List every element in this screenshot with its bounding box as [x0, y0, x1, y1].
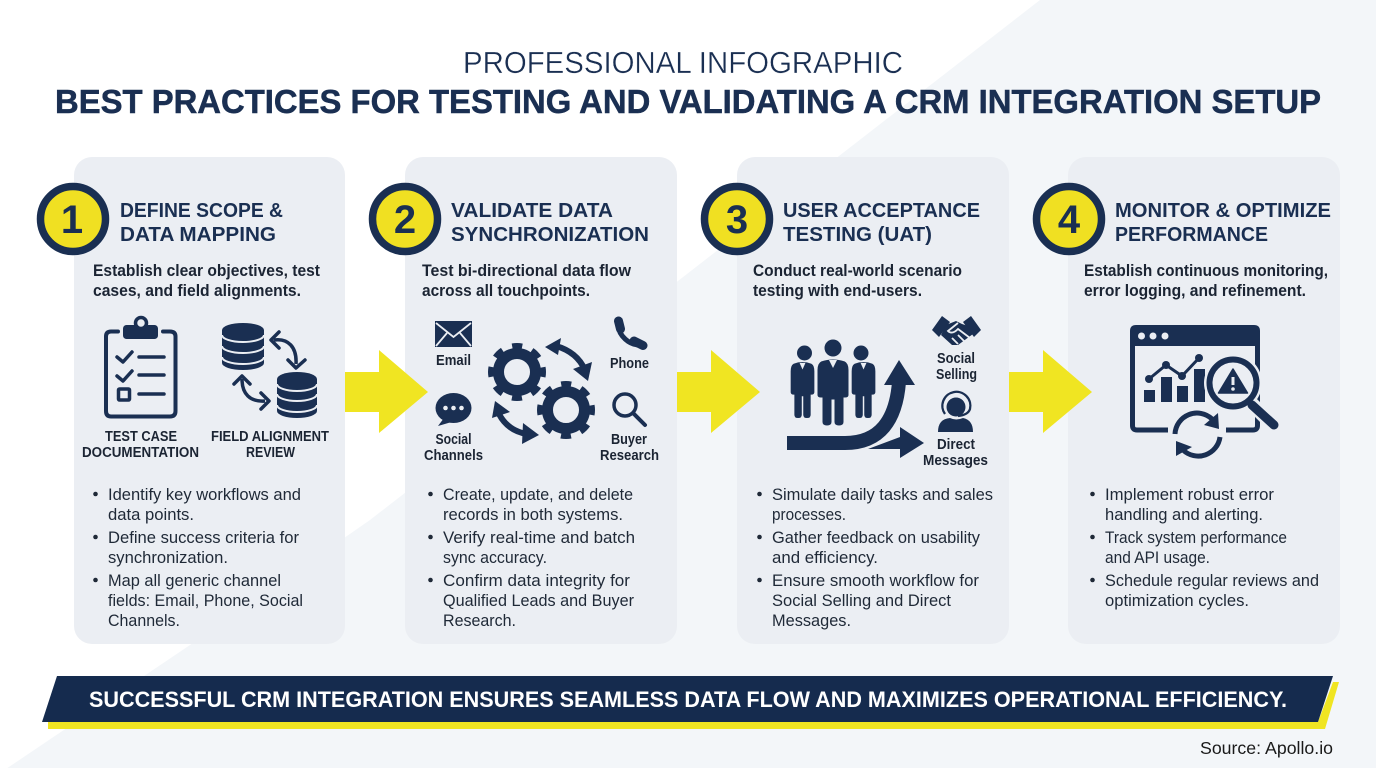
- step 1 bullet list: fields: Email, Phone, Social: [108, 592, 303, 610]
- step 2 bullet list: sync accuracy.: [443, 549, 547, 567]
- label: social channels: [424, 432, 483, 464]
- step 2 bullet list: Create, update, and delete: [443, 486, 633, 504]
- step 1 description: Establish clear objectives, test: [93, 262, 320, 280]
- step 1 bullet list: Map all generic channel: [108, 572, 281, 590]
- step 2 bullet list: records in both systems.: [443, 506, 623, 524]
- step 2 description: across all touchpoints.: [422, 282, 590, 300]
- step 2 bullet list: Qualified Leads and Buyer: [443, 592, 634, 610]
- step 3 number badge: [704, 186, 770, 252]
- icon labels: [82, 429, 329, 461]
- step 2 number badge: 2: [394, 198, 416, 242]
- banner: conclusion: [42, 676, 1339, 729]
- step 4 bullet list: [1090, 486, 1319, 610]
- icon: email envelope: [435, 321, 472, 347]
- step 2 description: Test bi-directional data flow: [422, 262, 631, 280]
- step 3 description: Conduct real-world scenario: [753, 262, 962, 280]
- icon: databases with sync arrows: [222, 323, 317, 418]
- label: social selling: Social: [937, 351, 975, 367]
- step 4 bullet list: Implement robust error: [1105, 486, 1274, 504]
- step 1 heading: [120, 199, 283, 246]
- step 3 bullet list: Simulate daily tasks and sales: [772, 486, 993, 504]
- step 4 heading: PERFORMANCE: [1115, 223, 1268, 246]
- step 3 bullet list: and efficiency.: [772, 549, 878, 567]
- step 2 heading: VALIDATE DATA: [451, 199, 613, 222]
- step 4 bullet list: Track system performance: [1105, 529, 1287, 547]
- step 4 description: error logging, and refinement.: [1084, 282, 1306, 300]
- label: social selling: [936, 351, 977, 383]
- step 3 bullet list: processes.: [772, 506, 846, 524]
- icon labels: DOCUMENTATION: [82, 445, 199, 461]
- icon: chat bubble: [436, 393, 472, 426]
- step 3 bullet list: Social Selling and Direct: [772, 592, 951, 610]
- step 1 number badge: 1: [61, 198, 83, 242]
- label: phone: Phone: [610, 356, 649, 372]
- step 1 heading: DEFINE SCOPE &: [120, 199, 283, 222]
- label: email: Email: [436, 353, 471, 369]
- step 2 bullet list: Research.: [443, 612, 516, 630]
- label: direct messages: Direct: [937, 437, 975, 453]
- title: PROFESSIONAL INFOGRAPHIC: [463, 45, 903, 80]
- step 1 bullet list: [93, 486, 303, 630]
- step 1 description: cases, and field alignments.: [93, 282, 301, 300]
- label: buyer research: [600, 432, 659, 464]
- icon: dashboard window with alert magnifier and sync: [1130, 325, 1274, 456]
- step 4 description: [1084, 262, 1328, 300]
- step 3 bullet list: [757, 486, 993, 630]
- icon labels: TEST CASE: [105, 429, 177, 445]
- arrow: step 1 to 2: [345, 350, 428, 433]
- step 1 bullet list: Define success criteria for: [108, 529, 299, 547]
- label: direct messages: [923, 437, 988, 469]
- icon labels: REVIEW: [246, 445, 295, 461]
- step 2 bullet list: Confirm data integrity for: [443, 572, 631, 590]
- banner: conclusion: SUCCESSFUL CRM INTEGRATION ENSURES SEAMLESS DATA FLOW AND MAXIMIZES OPERATIONAL EFFICIENCY.: [89, 687, 1287, 712]
- step 4 heading: [1115, 199, 1331, 246]
- step 4 bullet list: and API usage.: [1105, 549, 1210, 567]
- step 2 number badge: [372, 186, 438, 252]
- icon: clipboard checklist: [106, 318, 176, 416]
- step 2 heading: [451, 199, 649, 246]
- step 1 bullet list: synchronization.: [108, 549, 228, 567]
- arrow: step 3 to 4: [1009, 350, 1092, 433]
- step 3 heading: [783, 199, 980, 246]
- arrow: step 2 to 3: [677, 350, 760, 433]
- step 4 heading: MONITOR & OPTIMIZE: [1115, 199, 1331, 222]
- step 2 heading: SYNCHRONIZATION: [451, 223, 649, 246]
- source note: Source: Apollo.io: [1200, 738, 1333, 758]
- step 2 description: [422, 262, 631, 300]
- label: social channels: Social: [436, 432, 472, 448]
- icon: magnifier: [614, 394, 645, 425]
- title: [55, 45, 1321, 120]
- label: social channels: Channels: [424, 448, 483, 464]
- step 4 number badge: [1036, 186, 1102, 252]
- step 3 bullet list: Messages.: [772, 612, 851, 630]
- step 3 description: [753, 262, 962, 300]
- step 4 bullet list: handling and alerting.: [1105, 506, 1263, 524]
- step 4 bullet list: optimization cycles.: [1105, 592, 1249, 610]
- label: social selling: Selling: [936, 367, 977, 383]
- icon: gears with sync arrows: [491, 338, 592, 444]
- step 4 description: Establish continuous monitoring,: [1084, 262, 1328, 280]
- icon: team of users with rising arrow: [787, 340, 924, 458]
- step 1 heading: DATA MAPPING: [120, 223, 276, 246]
- step 3 bullet list: Gather feedback on usability: [772, 529, 981, 547]
- step 3 heading: USER ACCEPTANCE: [783, 199, 980, 222]
- step 1 bullet list: Identify key workflows and: [108, 486, 301, 504]
- panel: step 4 monitor and optimize performance: [1036, 157, 1340, 644]
- label: buyer research: Buyer: [611, 432, 647, 448]
- step 4 number badge: 4: [1058, 198, 1081, 242]
- panel: step 3 user acceptance testing: [704, 157, 1009, 644]
- step 3 bullet list: Ensure smooth workflow for: [772, 572, 980, 590]
- icon labels: FIELD ALIGNMENT: [211, 429, 329, 445]
- step 1 description: [93, 262, 320, 300]
- icon: phone: [618, 321, 643, 346]
- step 1 bullet list: data points.: [108, 506, 194, 524]
- step 1 bullet list: Channels.: [108, 612, 180, 630]
- title: BEST PRACTICES FOR TESTING AND VALIDATING A CRM INTEGRATION SETUP: [55, 83, 1321, 120]
- panel: step 2 validate data synchronization: [372, 157, 677, 644]
- step 3 heading: TESTING (UAT): [783, 223, 932, 246]
- icon: headset support agent: [938, 392, 973, 432]
- icon: handshake: [932, 316, 981, 345]
- step 4 bullet list: Schedule regular reviews and: [1105, 572, 1319, 590]
- step 1 number badge: [40, 186, 106, 252]
- step 2 bullet list: Verify real-time and batch: [443, 529, 635, 547]
- step 3 number badge: 3: [726, 198, 748, 242]
- label: direct messages: Messages: [923, 453, 988, 469]
- label: buyer research: Research: [600, 448, 659, 464]
- step 2 bullet list: [428, 486, 635, 630]
- step 3 description: testing with end-users.: [753, 282, 922, 300]
- panel: step 1 define scope and data mapping: [40, 157, 345, 644]
